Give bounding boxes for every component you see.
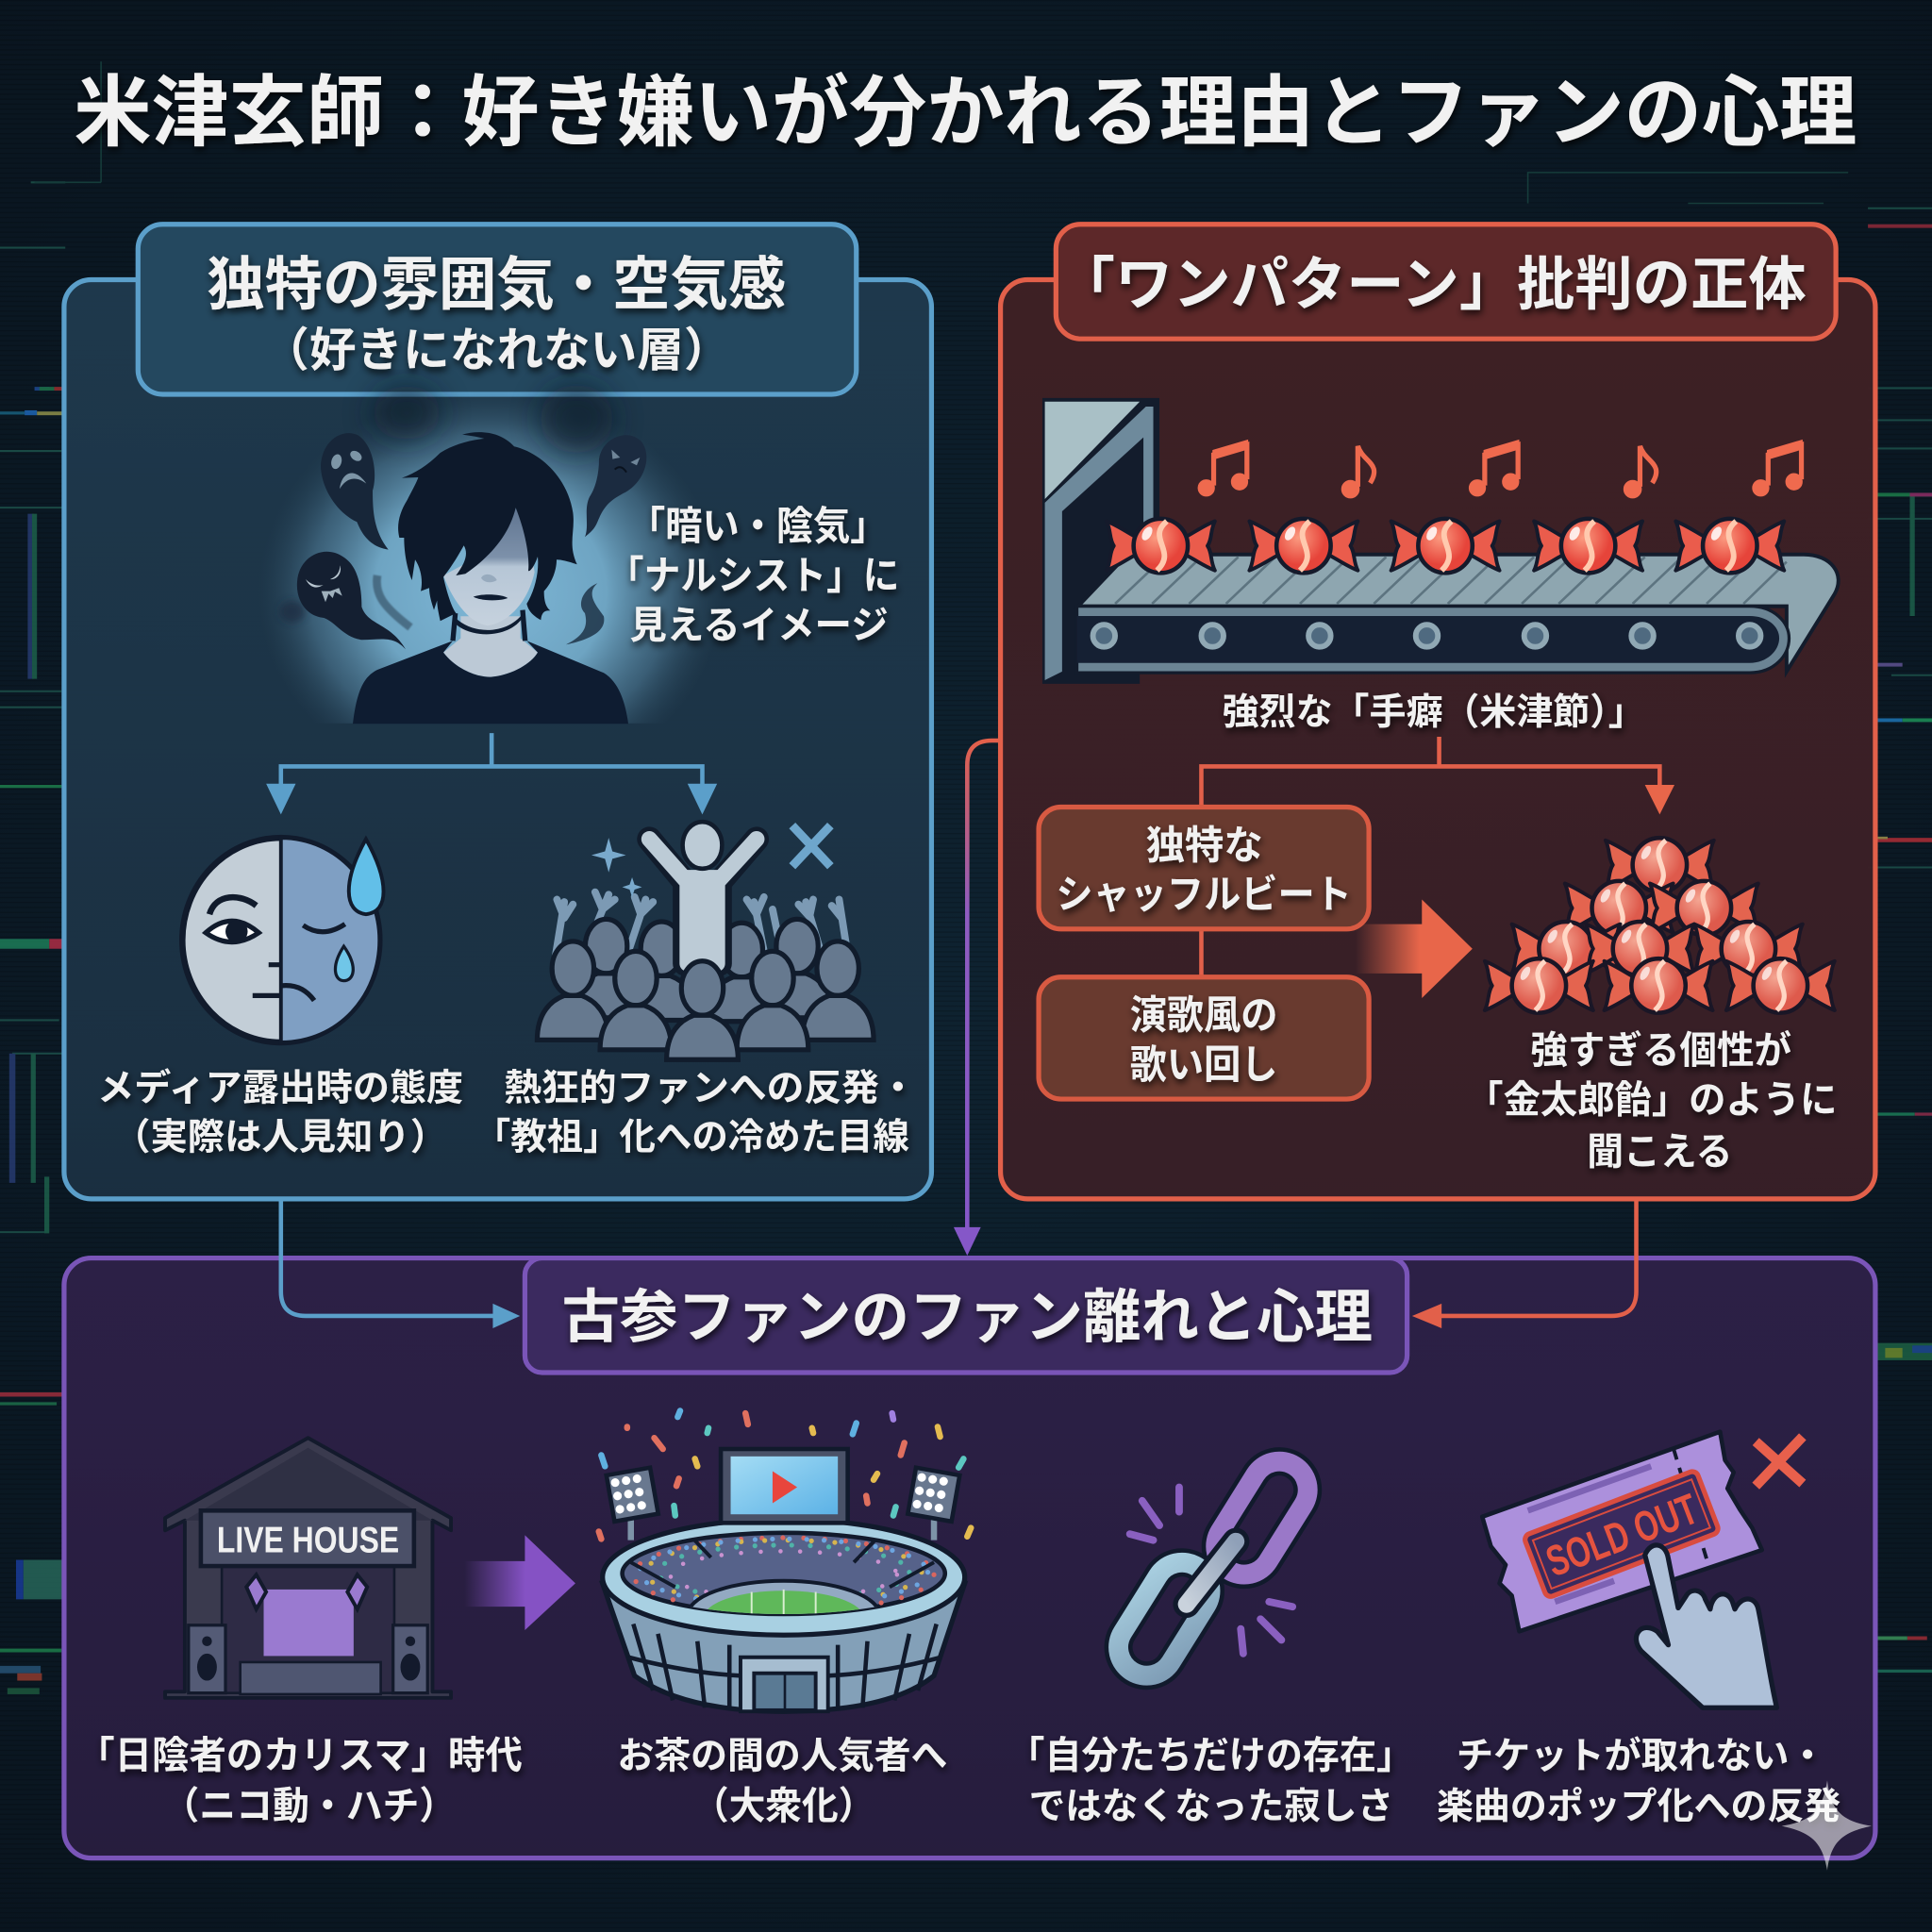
icon: idolized figure and crowd [537, 822, 874, 1059]
shirt [353, 641, 628, 724]
arrows: habit branch [1201, 737, 1674, 977]
icon: conveyor belt with candies [1042, 398, 1839, 684]
heading: unique atmosphere [138, 225, 857, 394]
face [443, 508, 535, 625]
text block: mainstream popularity: （大衆化） [692, 1784, 874, 1827]
ghost: angry [585, 435, 646, 537]
icon: half face with sweat [182, 838, 384, 1042]
box: shuffle beat: 独特な [1146, 823, 1263, 867]
box: enka style singing: 演歌風の [1130, 993, 1277, 1038]
text block: loneliness [1008, 1733, 1413, 1827]
icon: stadium [599, 1411, 971, 1711]
text block: image: 「ナルシスト」に [608, 553, 899, 597]
text block: image: 見えるイメージ [629, 604, 889, 647]
text block: mainstream popularity: お茶の間の人気者へ [617, 1736, 947, 1776]
text block: fan backlash: 「教祖」化への冷めた目線 [475, 1118, 909, 1158]
heading: unique atmosphere: 独特の雰囲気・空気感 [207, 253, 786, 318]
text block: image: 「暗い・陰気」 [628, 504, 887, 548]
title: 米津玄師：好き嫌いが分かれる理由とファンの心理 [74, 71, 1857, 157]
panel: old fans leaving [64, 1258, 1875, 1858]
heading: one-pattern criticism: 「ワンパターン」批判の正体 [1058, 253, 1807, 318]
box: enka style singing: 歌い回し [1130, 1042, 1277, 1087]
icon: broken chain [1108, 1451, 1319, 1687]
text block: fan backlash [475, 1068, 917, 1158]
text block: media attitude: メディア露出時の態度 [97, 1067, 463, 1108]
text block: shade charisma era [77, 1733, 523, 1827]
panel: unique atmosphere [64, 279, 931, 1199]
text block: kintaro candy [1466, 1028, 1837, 1173]
text block: media attitude: （実際は人見知り） [113, 1118, 447, 1158]
text block: loneliness: 「自分たちだけの存在」 [1008, 1733, 1413, 1776]
heading: old fans leaving: 古参ファンのファン離れと心理 [562, 1285, 1373, 1350]
icon: sold out ticket and hand: SOLD OUT [1540, 1485, 1705, 1586]
icon: live house: LIVE HOUSE [217, 1521, 399, 1561]
text block: tickets and pop: チケットが取れない・ [1457, 1736, 1826, 1776]
text block: tickets and pop [1437, 1736, 1840, 1827]
arrow: red panel to purple heading via left side [954, 741, 1001, 1256]
panel: one-pattern criticism [1001, 279, 1875, 1199]
icon: sold out ticket and hand [1482, 1432, 1803, 1707]
text block: tickets and pop: 楽曲のポップ化への反発 [1437, 1787, 1840, 1827]
arrows: branch from person [266, 733, 717, 814]
text block: media attitude [97, 1067, 463, 1158]
text block: image [608, 504, 899, 647]
heading: one-pattern criticism [1056, 225, 1836, 339]
ghost: sad [321, 433, 389, 550]
text block: fan backlash: 熱狂的ファンへの反発・ [504, 1068, 917, 1108]
text block: kintaro candy: 「金太郎飴」のように [1466, 1077, 1837, 1121]
text block: strong habit: 強烈な「手癖（米津節）」 [1223, 692, 1645, 733]
icon: sparkle watermark [1782, 1780, 1872, 1871]
text block: shade charisma era: 「日陰者のカリスマ」時代 [77, 1733, 523, 1776]
arrow: blue panel to purple heading [281, 1199, 520, 1328]
icon: candy pile [1485, 838, 1835, 1013]
text block: kintaro candy: 聞こえる [1587, 1129, 1732, 1173]
icon: music notes [1198, 441, 1802, 498]
hair [398, 432, 577, 621]
box: shuffle beat: シャッフルビート [1056, 873, 1352, 917]
arrow: red panel to purple heading [1412, 1199, 1637, 1328]
neck and chest [443, 616, 538, 677]
box: enka style singing [1039, 977, 1369, 1099]
icon: dark haired person with ghosts [275, 375, 706, 724]
text block: mainstream popularity [617, 1736, 947, 1827]
heading: unique atmosphere: （好きになれない層） [262, 324, 731, 376]
text block: loneliness: ではなくなった寂しさ [1029, 1787, 1393, 1827]
ghost: grinning [280, 552, 406, 649]
arrow: to candy pile [1356, 899, 1473, 998]
text block: shade charisma era: （ニコ動・ハチ） [162, 1784, 456, 1827]
heading: old fans leaving [525, 1258, 1407, 1373]
text block: kintaro candy: 強すぎる個性が [1530, 1028, 1791, 1072]
arrow: live house to stadium [464, 1535, 575, 1630]
icon: live house [165, 1438, 451, 1698]
box: shuffle beat [1039, 808, 1369, 929]
